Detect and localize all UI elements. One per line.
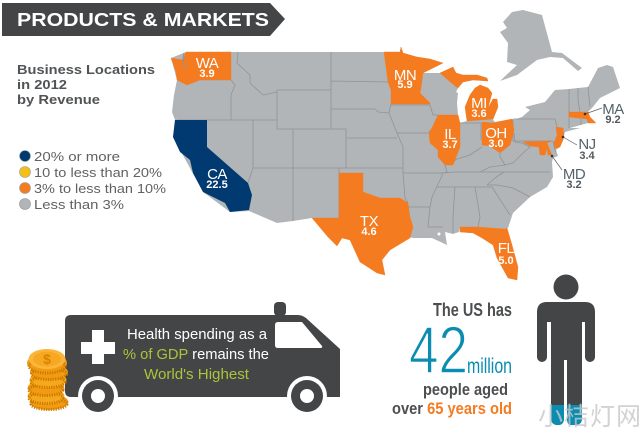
statistic text: The US has xyxy=(433,300,512,320)
callouts: MA NJ MD xyxy=(551,101,624,191)
statistic text: 42 xyxy=(409,313,468,388)
state labels: CA xyxy=(207,166,227,183)
ambulance text xyxy=(123,326,269,383)
icon: person xyxy=(537,274,595,425)
icon: coin stack xyxy=(27,349,68,410)
legend: 3% to less than 10% xyxy=(34,181,166,196)
statistic text: people aged xyxy=(423,380,508,399)
state labels: MN xyxy=(394,67,416,84)
statistic text: over 65 years old xyxy=(392,399,512,418)
orange states xyxy=(171,47,596,280)
legend xyxy=(20,149,166,212)
callouts: MA NJ MD: 3.2 xyxy=(566,179,582,191)
state labels: 3.9 xyxy=(199,68,215,80)
ambulance text: Health spending as a xyxy=(127,326,268,343)
state labels: TX xyxy=(360,213,379,230)
state labels: 4.6 xyxy=(361,226,377,238)
statistic text xyxy=(392,300,512,418)
callouts: MA NJ MD: NJ xyxy=(578,136,596,153)
callouts: MA NJ MD: MA xyxy=(602,101,624,118)
state borders xyxy=(177,52,590,233)
state labels: 22.5 xyxy=(206,179,228,191)
state labels: FL xyxy=(498,240,514,257)
icon: ambulance xyxy=(60,302,340,422)
callouts: MA NJ MD: 3.4 xyxy=(579,150,596,162)
state labels xyxy=(196,55,514,267)
state labels: MI xyxy=(471,95,487,112)
state labels: IL xyxy=(444,126,456,143)
Puget Sound and New Orleans details xyxy=(183,53,440,236)
title banner: PRODUCTS & MARKETS xyxy=(17,9,269,30)
subtitle: in 2012 xyxy=(17,77,67,92)
legend: 20% or more xyxy=(34,149,120,164)
subtitle: by Revenue xyxy=(17,92,100,107)
subtitle xyxy=(17,62,155,107)
state labels: 3.6 xyxy=(471,108,487,120)
callouts: MA NJ MD: 9.2 xyxy=(605,114,621,126)
US map xyxy=(171,10,620,280)
Alaska xyxy=(500,10,582,81)
icon: coin stack: $ xyxy=(43,351,51,367)
state labels: 5.9 xyxy=(397,79,413,91)
state labels: 3.0 xyxy=(488,138,504,150)
subtitle: Business Locations xyxy=(17,62,155,77)
state labels: WA xyxy=(196,55,219,72)
state: California xyxy=(173,120,252,212)
ambulance text: % of GDP remains the xyxy=(123,346,269,363)
title banner xyxy=(2,3,285,36)
gray land mass xyxy=(171,47,620,245)
ambulance text: World's Highest xyxy=(144,366,250,383)
state labels: OH xyxy=(485,125,507,142)
legend: Less than 3% xyxy=(34,197,124,212)
legend: 10 to less than 20% xyxy=(34,165,162,180)
state labels: 3.7 xyxy=(442,139,458,151)
callouts: MA NJ MD: MD xyxy=(563,166,586,183)
state labels: 5.0 xyxy=(498,255,514,267)
statistic text: million xyxy=(467,355,512,378)
watermark: 小桔灯网 xyxy=(538,397,640,433)
